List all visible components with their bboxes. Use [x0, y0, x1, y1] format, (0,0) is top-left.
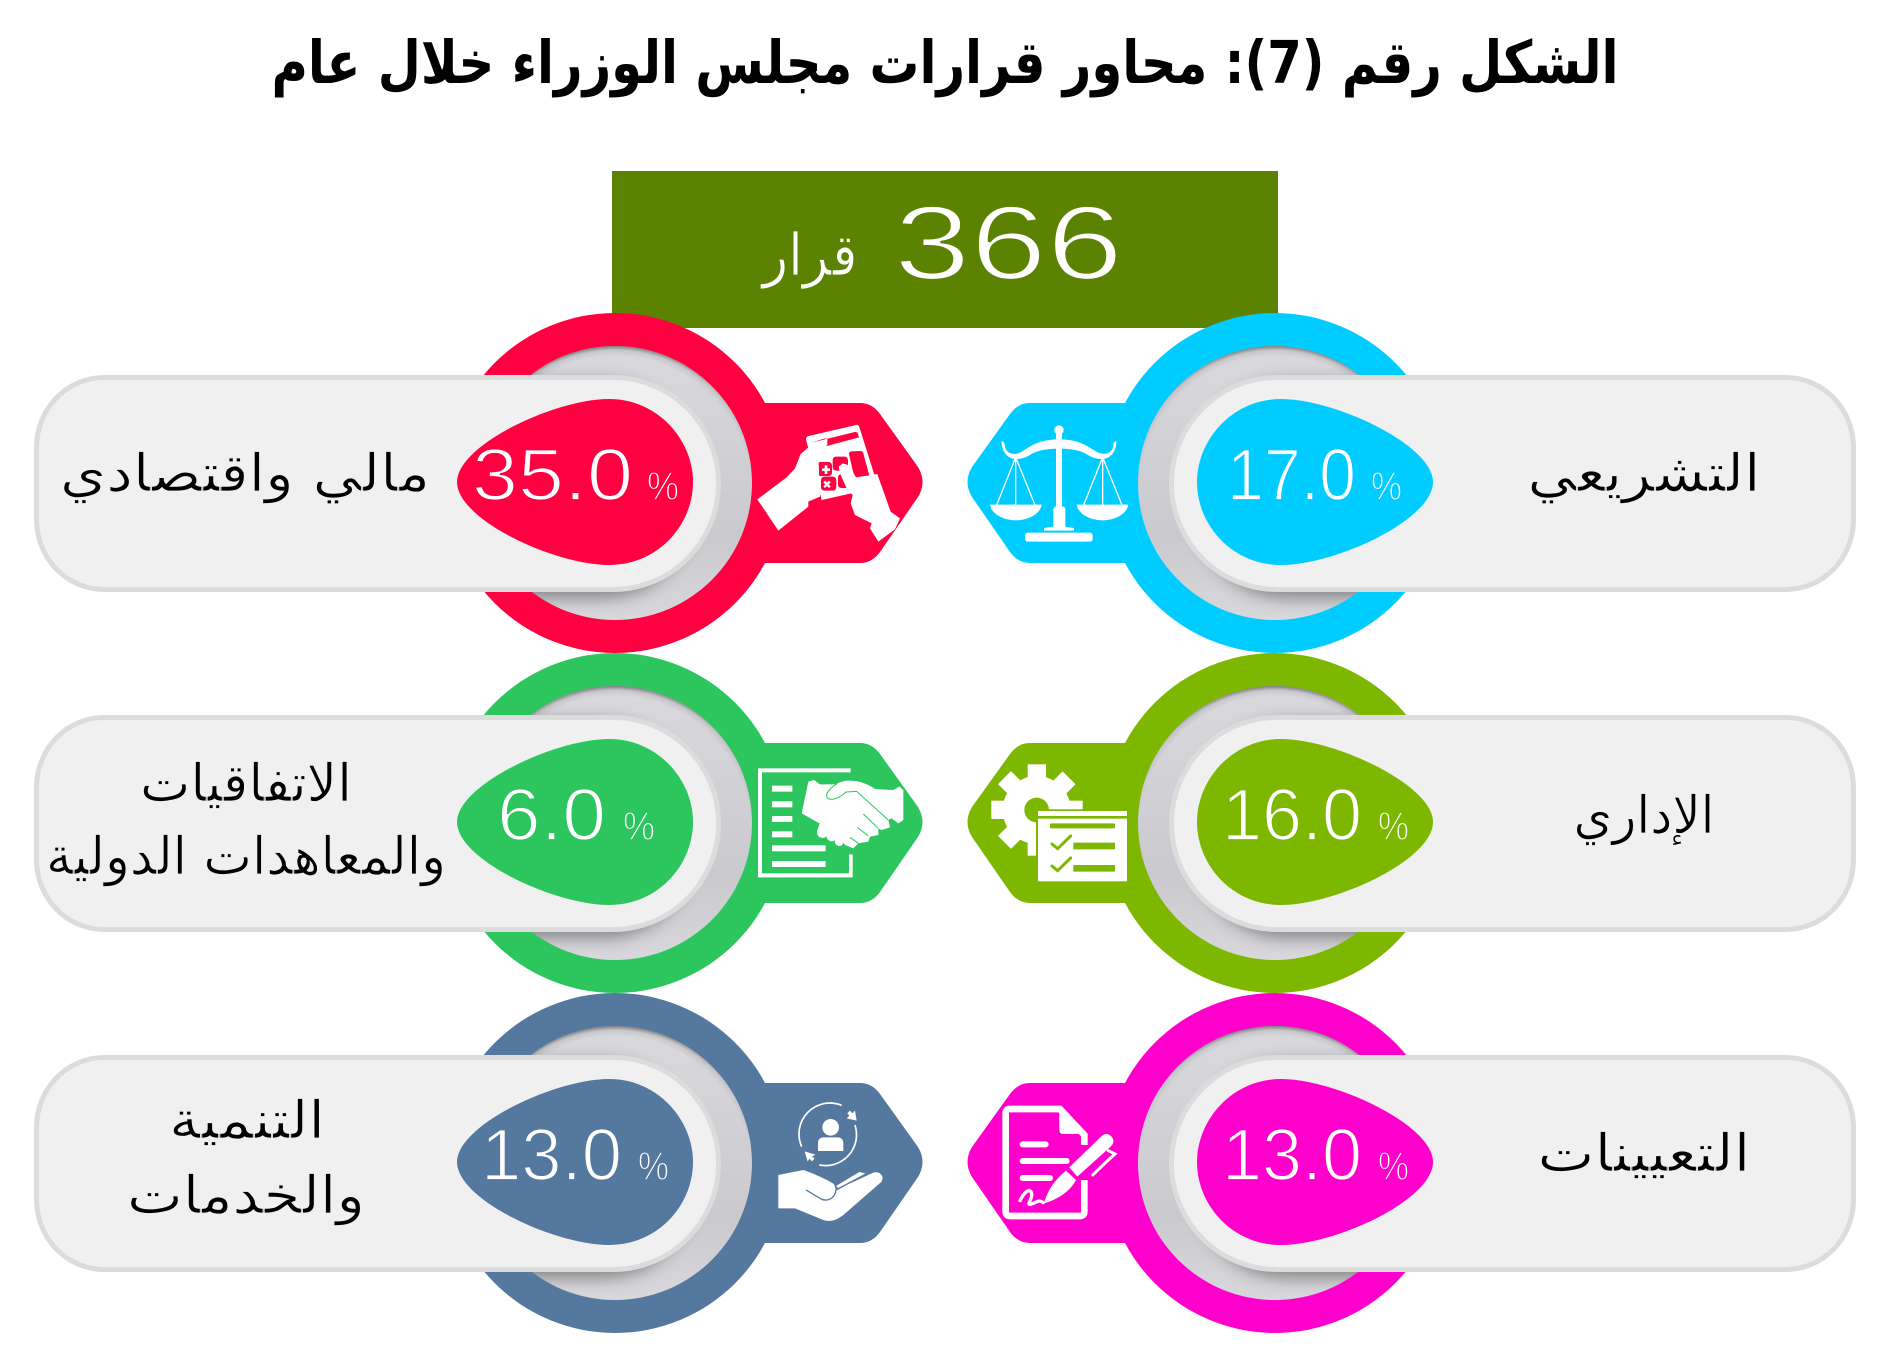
- header box: total decisions: [612, 171, 1278, 328]
- label line 2: والمعاهدات الدولية: [46, 827, 446, 887]
- percentage: 35.0: [472, 435, 633, 516]
- icon: hand holding person: [778, 1103, 883, 1221]
- panel: agreements and treaties: [34, 653, 922, 993]
- label: التعيينات: [1538, 1124, 1750, 1184]
- panel: development and services: %: [638, 1145, 669, 1189]
- total unit label: قرار: [760, 221, 858, 290]
- label: الاتفاقيات: [140, 754, 352, 814]
- panel: administrative: %: [1378, 805, 1409, 849]
- total number: 366: [894, 185, 1123, 302]
- icon: document and pen: [1006, 1109, 1115, 1216]
- panel: legislative: [968, 313, 1856, 653]
- percentage: 13.0: [481, 1115, 622, 1196]
- panel: administrative: [968, 653, 1856, 993]
- percentage: 6.0: [497, 775, 606, 856]
- title: الشكل رقم (7): محاور قرارات مجلس الوزراء خلال عام: [272, 28, 1618, 98]
- label: التنمية: [169, 1091, 325, 1151]
- icon: document and handshake: [758, 768, 903, 877]
- percentage: 13.0: [1222, 1115, 1362, 1196]
- label: مالي واقتصادي: [60, 444, 430, 504]
- percentage: 17.0: [1227, 435, 1356, 516]
- icon: gear and checklist: [991, 764, 1131, 884]
- icon: balance scales: [990, 425, 1128, 542]
- panel: appointments: %: [1378, 1145, 1409, 1189]
- label: التشريعي: [1528, 444, 1760, 504]
- label: الإداري: [1574, 786, 1714, 846]
- panel: appointments: [968, 993, 1856, 1333]
- panel: financial and economic: [34, 313, 922, 653]
- panel: legislative: %: [1371, 465, 1402, 509]
- panel: development and services: [34, 993, 922, 1333]
- icon: calculator and hands: [757, 425, 900, 542]
- label line 2: والخدمات: [127, 1166, 365, 1226]
- panel: agreements and treaties: %: [623, 805, 655, 849]
- panel: financial and economic: %: [647, 465, 679, 509]
- percentage: 16.0: [1222, 775, 1362, 856]
